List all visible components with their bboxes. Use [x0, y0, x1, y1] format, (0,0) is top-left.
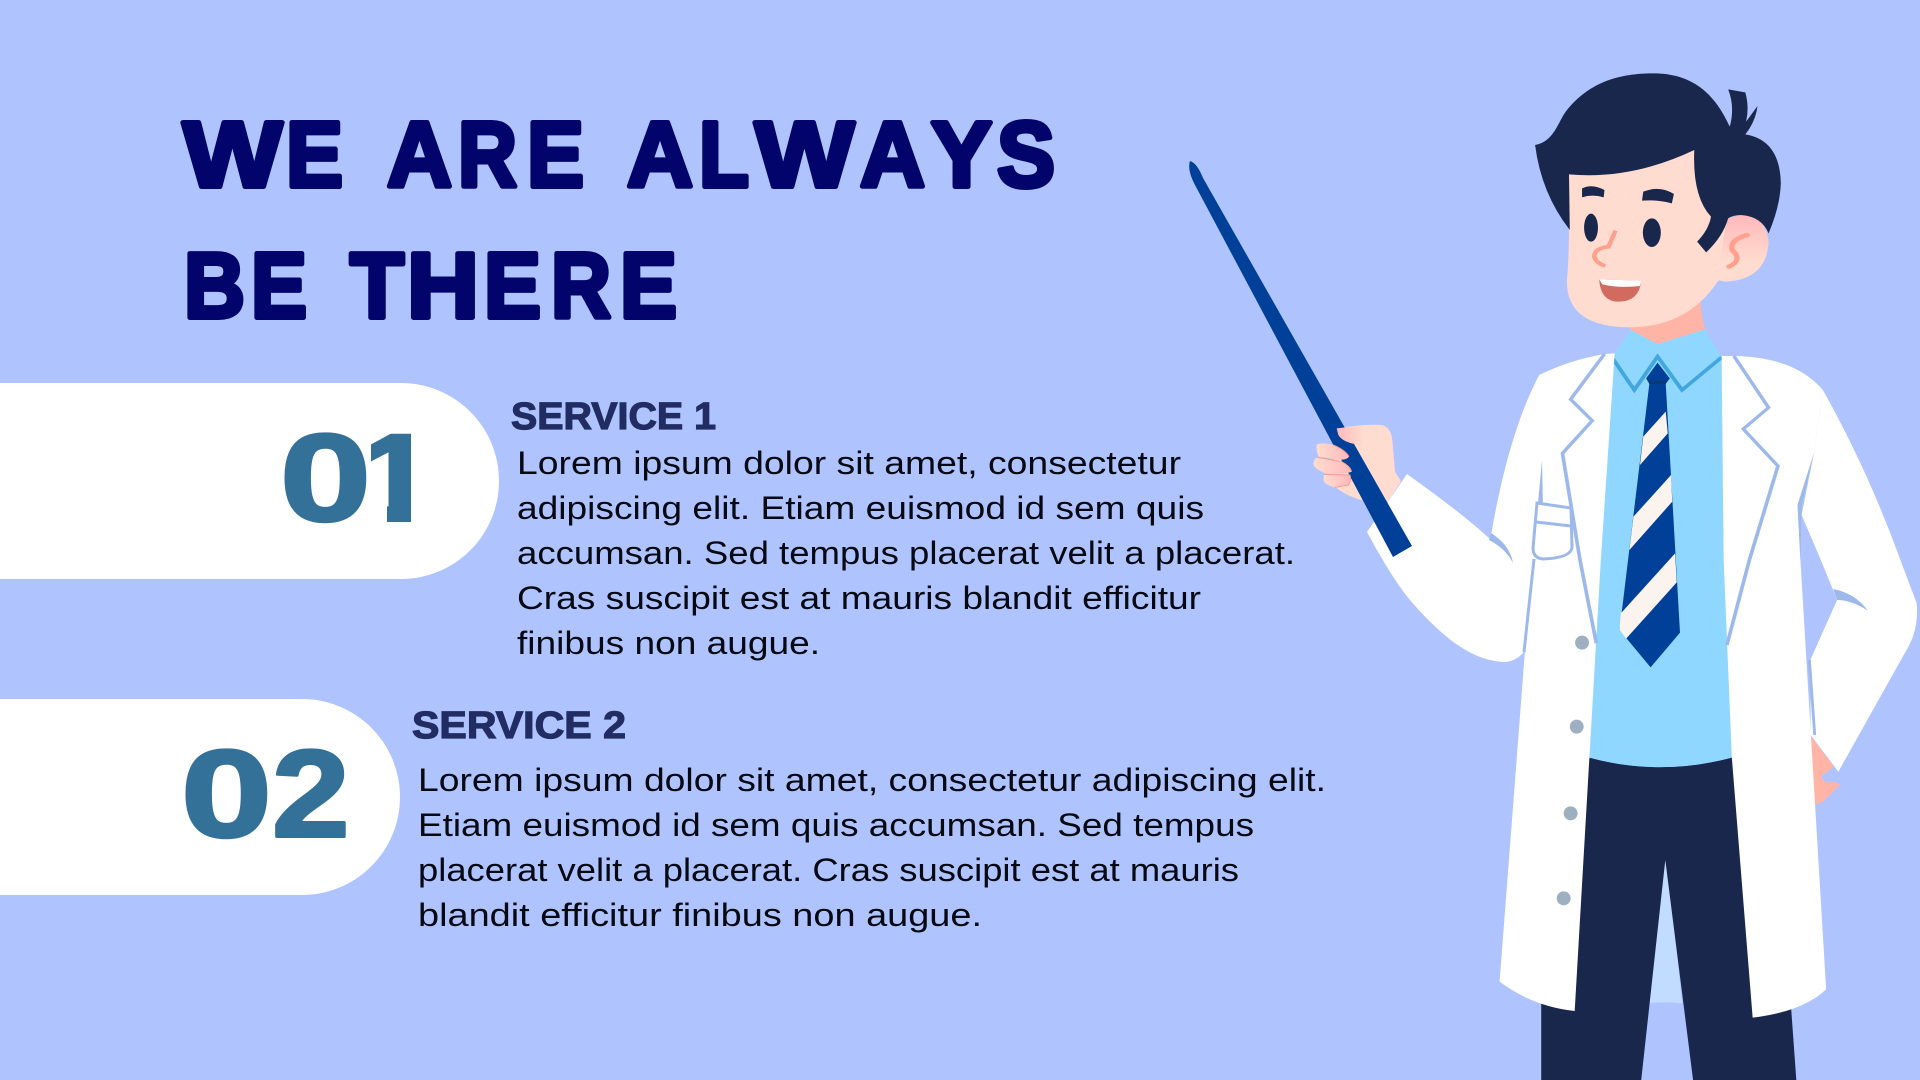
title: E — [527, 102, 584, 206]
title: E — [620, 234, 677, 338]
title: R — [551, 234, 611, 338]
collar — [1613, 329, 1722, 390]
pointer stick — [1189, 161, 1412, 557]
palm — [1333, 425, 1401, 501]
title: W — [183, 102, 282, 206]
ear — [1717, 216, 1769, 282]
text block: service 2 description — [418, 762, 1326, 933]
title: E — [484, 234, 541, 338]
text block: service 2 description: Lorem ipsum dolor sit amet, consectetur adipiscing elit. — [418, 762, 1326, 798]
panel: service 1 number pill: 1 — [356, 410, 438, 548]
pointing hand and stick — [1189, 161, 1530, 662]
title: W — [755, 102, 854, 206]
text block: service 1 description: accumsan. Sed tempus placerat velit a placerat. — [517, 535, 1295, 571]
text block: service 1 description: Cras suscipit est at mauris blandit efficitur — [517, 580, 1201, 616]
text block: service 1 description: Lorem ipsum dolor sit amet, consectetur — [517, 445, 1181, 481]
panel: service 2 number pill — [0, 699, 400, 895]
trousers — [1541, 758, 1796, 1080]
title: E — [251, 234, 307, 338]
coat pocket and seam — [1524, 503, 1572, 652]
text block: service 1 description: finibus non augue. — [517, 625, 820, 661]
sleeve fold — [1489, 533, 1513, 563]
title: L — [699, 102, 749, 206]
panel: service 1 number pill — [0, 383, 499, 579]
panel: service 1 number pill: 0 — [280, 410, 371, 548]
lapels — [1562, 354, 1815, 735]
left sleeve — [1367, 474, 1530, 662]
text block: service 2 description: blandit efficitur finibus non augue. — [418, 897, 982, 933]
buttons — [1557, 636, 1589, 905]
text block: service 2 description: placerat velit a placerat. Cras suscipit est at mauris — [418, 852, 1239, 888]
title: A — [627, 102, 693, 206]
doctor body — [1491, 73, 1917, 1080]
mouth — [1599, 279, 1641, 302]
hair — [1535, 73, 1781, 252]
coat lining — [1649, 840, 1682, 1003]
title: S — [997, 102, 1055, 206]
title: R — [458, 102, 517, 206]
coat creases — [1538, 453, 1868, 611]
illustration: doctor with pointer — [1189, 73, 1917, 1080]
panel: service 2 number pill: 2 — [272, 726, 350, 864]
face — [1567, 150, 1729, 327]
title — [183, 102, 1055, 338]
panel: service 2 number pill: 0 — [181, 726, 272, 864]
title: T — [350, 234, 404, 338]
eyebrows — [1582, 186, 1674, 203]
title: B — [184, 234, 245, 338]
text block: service 1 description: adipiscing elit. Etiam euismod id sem quis — [517, 490, 1204, 526]
nose — [1594, 231, 1616, 266]
title: Y — [931, 102, 992, 206]
title: E — [286, 102, 343, 206]
title: H — [407, 234, 479, 338]
tie — [1620, 363, 1680, 667]
eyes — [1584, 214, 1661, 247]
text block: service 2 description: Etiam euismod id sem quis accumsan. Sed tempus — [418, 807, 1254, 843]
heading: service 2: SERVICE 2 — [412, 705, 626, 747]
hidden hand — [1807, 730, 1840, 805]
fingers — [1313, 425, 1363, 487]
title: A — [387, 102, 452, 206]
neck — [1629, 300, 1705, 344]
heading: service 1: SERVICE 1 — [511, 396, 716, 438]
right sleeve — [1802, 390, 1917, 772]
coat body left — [1491, 353, 1615, 1011]
title: A — [860, 102, 925, 206]
coat body right — [1722, 356, 1826, 1018]
shirt — [1589, 355, 1732, 767]
text block: service 1 description — [517, 445, 1295, 661]
